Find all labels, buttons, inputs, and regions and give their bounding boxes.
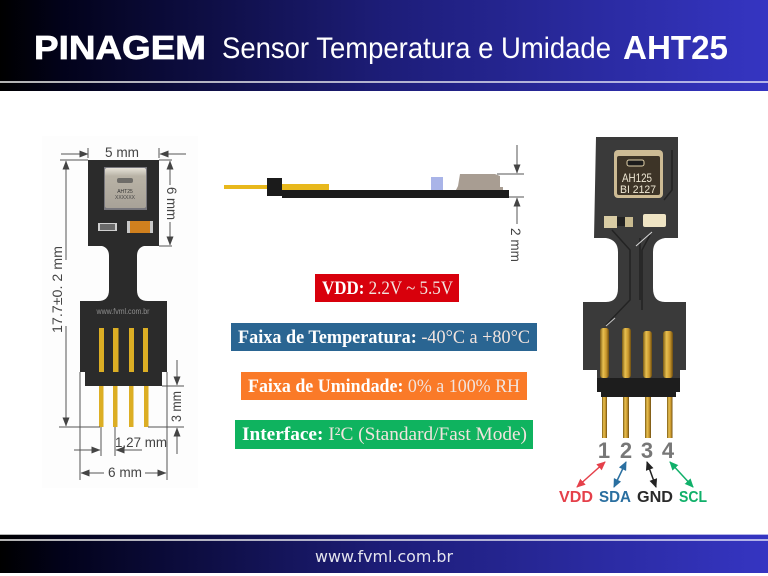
pin numbers: 4 <box>662 438 675 463</box>
panel: side view drawing <box>224 145 524 262</box>
header plastic <box>597 378 680 397</box>
pin and header <box>224 178 329 196</box>
pin labels: SCL <box>679 489 707 506</box>
dimension labels: 1,27 mm <box>115 434 167 450</box>
pin numbers: 1 <box>598 438 610 463</box>
smd parts photo <box>604 214 666 228</box>
dimension labels: 3 mm <box>168 391 184 422</box>
spec box: VDD <box>315 274 459 302</box>
panel: technical drawing front view <box>42 136 198 488</box>
sensor chip: AHT25 <box>117 189 133 195</box>
board <box>282 190 509 198</box>
pin labels: SDA <box>599 489 631 506</box>
gold contacts and pins <box>99 328 148 427</box>
height label: 2 mm <box>508 228 524 262</box>
pin numbers <box>598 438 675 463</box>
spec box: humidity: Faixa de Umindade: 0% a 100% RH <box>248 377 520 397</box>
sensor chip: XXXXXX <box>115 195 136 201</box>
pin numbers: 2 <box>620 438 632 463</box>
header banner <box>0 0 768 91</box>
title: PINAGEM <box>34 29 206 66</box>
title: AHT25 <box>623 29 728 66</box>
traces <box>606 150 672 325</box>
dimension labels: 6 mm <box>164 187 180 220</box>
footer banner <box>0 534 768 573</box>
title <box>34 29 728 66</box>
sensor chip <box>104 167 147 210</box>
pin labels <box>559 489 707 506</box>
spec box: interface <box>235 420 533 449</box>
dimension lines <box>59 148 186 480</box>
gold pads photo <box>600 328 673 438</box>
height dimension <box>497 145 524 224</box>
pcb photo <box>583 137 686 378</box>
pcb outline <box>80 160 167 386</box>
spec box: humidity <box>241 372 527 400</box>
dimension labels: 5 mm <box>105 144 139 160</box>
spec box: VDD: VDD: 2.2V ~ 5.5V <box>322 279 454 299</box>
footer url: www.fvml.com.br <box>315 547 453 566</box>
pin labels: GND <box>637 489 673 506</box>
spec box: temperature: Faixa de Temperatura: -40°C a +80°C <box>238 328 530 348</box>
spec box: interface: Interface: I²C (Standard/Fast Mode) <box>242 425 527 445</box>
side components <box>431 174 503 190</box>
chip photo: BI 2127 <box>620 184 656 196</box>
dimension labels: 6 mm <box>108 464 142 480</box>
watermark: www.fvml.com.br <box>96 307 150 316</box>
pin numbers: 3 <box>641 438 653 463</box>
title: Sensor Temperatura e Umidade <box>222 32 611 65</box>
smd components <box>98 221 153 233</box>
pin labels: VDD <box>559 489 593 506</box>
chip photo: AH125 <box>622 171 652 185</box>
pin arrows <box>577 462 693 487</box>
dimension labels: 17.7±0. 2 mm <box>49 246 65 333</box>
dimension labels <box>49 144 184 480</box>
panel: sensor photo <box>583 137 686 438</box>
chip photo <box>614 150 663 198</box>
spec box: temperature <box>231 323 537 351</box>
